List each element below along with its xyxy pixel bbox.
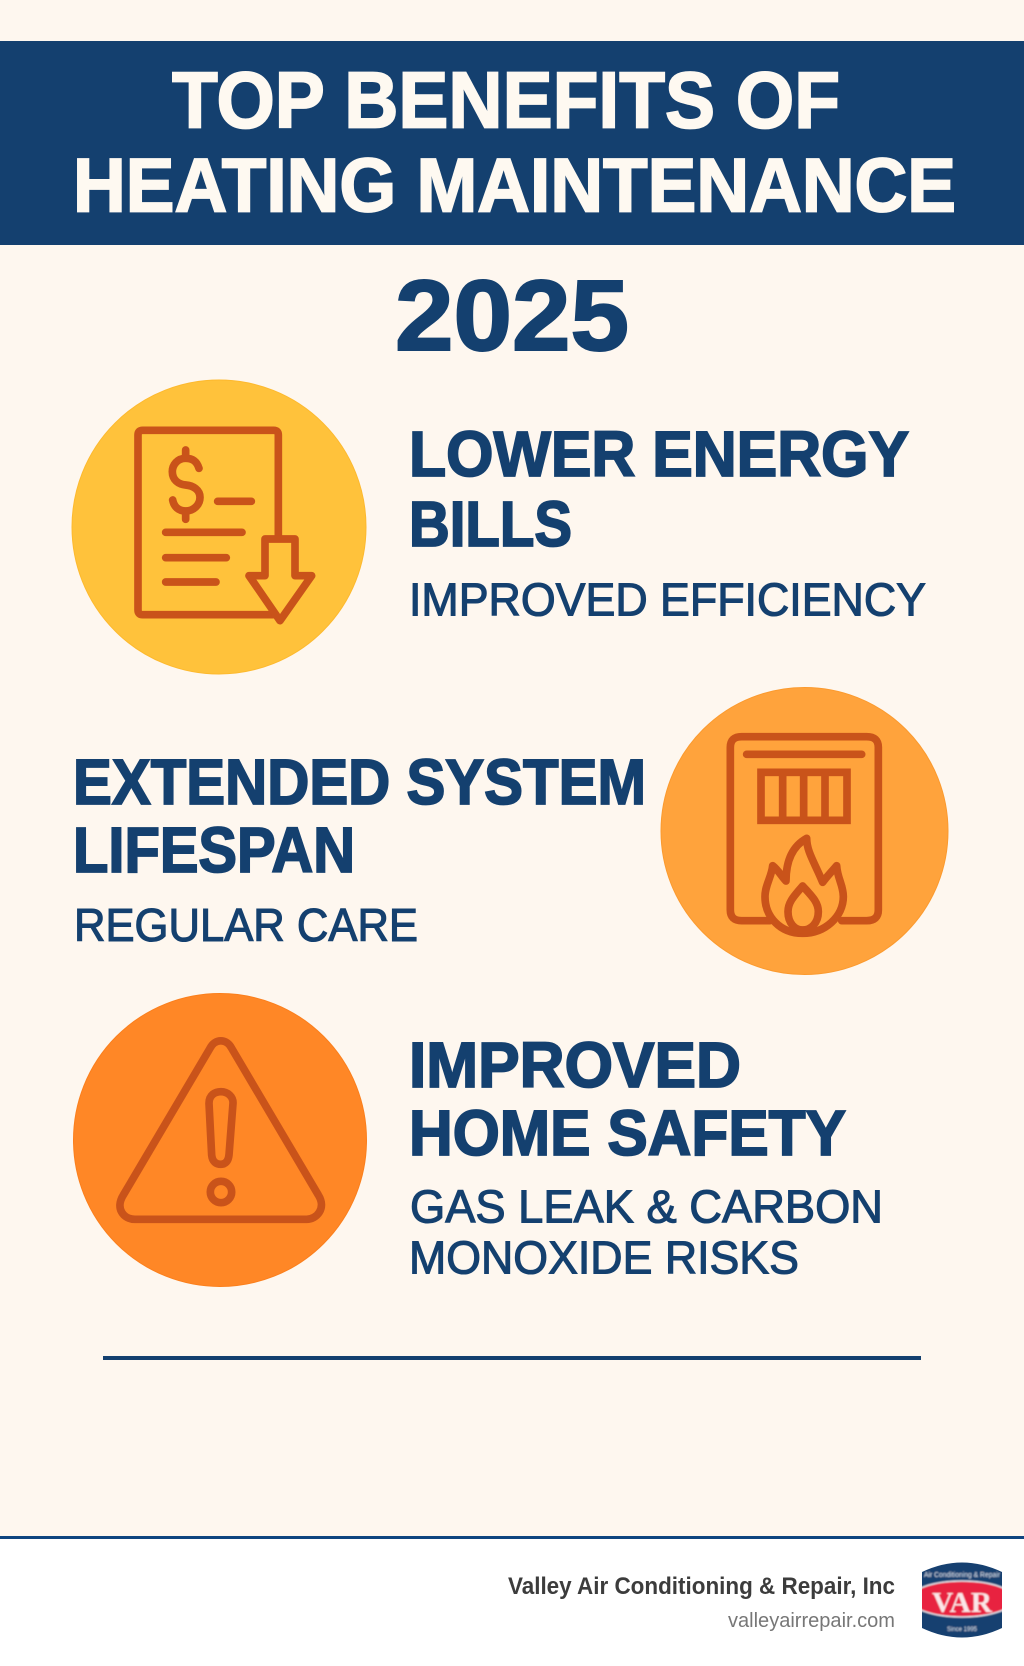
heading: extended system lifespan: LIFESPAN [73, 814, 355, 886]
year heading: 2025 [395, 260, 629, 372]
title line 2: HEATING MAINTENANCE [73, 144, 956, 228]
panel: extended system lifespan [73, 688, 948, 974]
panel: lower energy bills [72, 380, 926, 674]
icon: company logo: VAR [932, 1588, 993, 1619]
subheading: regular care: REGULAR CARE [74, 899, 418, 951]
footer [0, 1536, 1024, 1666]
heading: improved home safety: IMPROVED [409, 1029, 741, 1101]
panel: improved home safety [74, 994, 883, 1286]
icon: company logo: Since 1995 [947, 1627, 978, 1633]
subheading: gas leak and carbon monoxide risks: MONOXIDE RISKS [409, 1232, 799, 1284]
icon: company logo: Air Conditioning & Repair [924, 1572, 1001, 1579]
heading: lower energy bills [409, 418, 909, 560]
heading: improved home safety: HOME SAFETY [409, 1097, 846, 1169]
heading: extended system lifespan [73, 746, 646, 886]
title line 1: TOP BENEFITS OF [172, 56, 840, 144]
subheading: gas leak and carbon monoxide risks [409, 1180, 883, 1284]
icon: bill with down arrow [72, 380, 366, 674]
icon: company logo [922, 1562, 1002, 1638]
website: valleyairrepair.com [728, 1610, 895, 1632]
icon: warning triangle [74, 994, 366, 1286]
heading: extended system lifespan: EXTENDED SYSTEM [73, 746, 646, 818]
heading: lower energy bills: LOWER ENERGY [409, 418, 909, 490]
company name: Valley Air Conditioning & Repair, Inc [508, 1573, 895, 1600]
subheading: gas leak and carbon monoxide risks: GAS LEAK & CARBON [410, 1180, 883, 1232]
heading: improved home safety [409, 1029, 846, 1169]
title banner [0, 41, 1024, 245]
subheading: improved efficiency: IMPROVED EFFICIENCY [409, 574, 926, 626]
icon: furnace with flame [661, 688, 948, 974]
heading: lower energy bills: BILLS [409, 488, 572, 560]
